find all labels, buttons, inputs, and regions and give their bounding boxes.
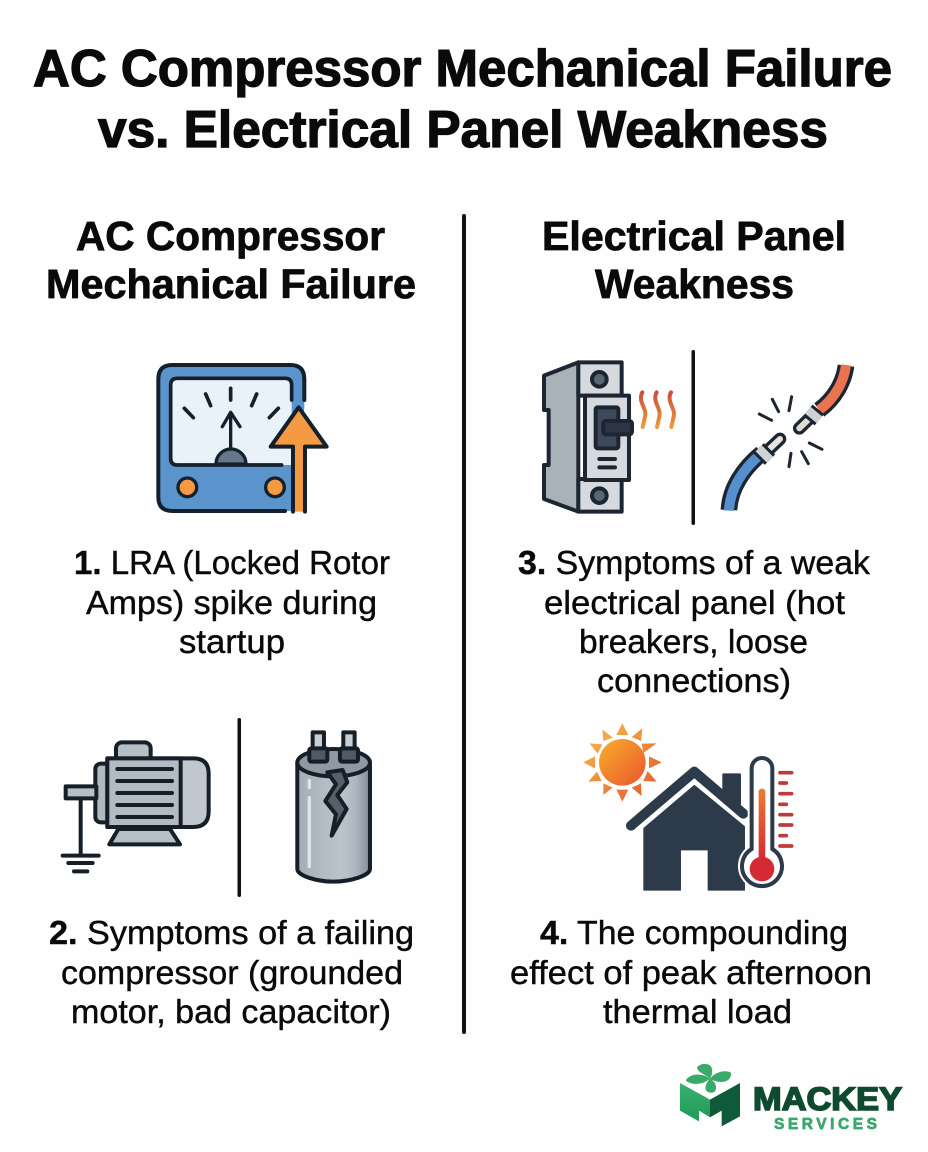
- icon: hot circuit breaker: [544, 362, 674, 512]
- icon: amp meter with rising arrow: [158, 365, 327, 512]
- icon: cracked capacitor: [297, 732, 370, 882]
- text: item 3: electrical panel (hot: [544, 584, 845, 621]
- text: item 4: [510, 914, 872, 1030]
- text: item 4: 4. The compounding: [540, 914, 848, 951]
- icon: loose wire connection: [729, 365, 846, 511]
- house: [631, 772, 744, 890]
- text: item 1: startup: [179, 623, 285, 660]
- logo mark: [680, 1064, 740, 1126]
- text: item 2: compressor (grounded: [61, 954, 403, 991]
- text: item 3: [518, 544, 871, 699]
- icon: sun, house and thermometer: [583, 723, 792, 890]
- thermometer: [742, 758, 792, 886]
- heading: AC compressor mechanical failure: [46, 213, 416, 307]
- title: [33, 40, 892, 159]
- heading: AC compressor mechanical failure: AC Compressor: [76, 213, 385, 259]
- logo: Mackey Services: SERVICES: [774, 1116, 877, 1133]
- heading: electrical panel weakness: Weakness: [595, 261, 794, 307]
- text: item 3: 3. Symptoms of a weak: [518, 544, 871, 581]
- text: item 1: [74, 544, 390, 660]
- text: item 1: Amps) spike during: [86, 584, 377, 621]
- icon: grounded motor: [63, 742, 209, 871]
- text: item 1: 1. LRA (Locked Rotor: [74, 544, 390, 581]
- text: item 3: connections): [597, 662, 791, 699]
- heading: electrical panel weakness: [542, 213, 846, 307]
- logo: Mackey Services: MACKEY: [753, 1081, 902, 1117]
- text: item 4: effect of peak afternoon: [510, 954, 872, 991]
- sun: [583, 723, 662, 802]
- heading: AC compressor mechanical failure: Mechanical Failure: [46, 261, 416, 307]
- divider: motor and capacitor: [238, 718, 241, 897]
- text: item 2: [49, 914, 414, 1030]
- text: item 3: breakers, loose: [579, 623, 808, 660]
- title: AC Compressor Mechanical Failure: [33, 40, 892, 98]
- logo: Mackey Services: [680, 1064, 902, 1133]
- title: vs. Electrical Panel Weakness: [98, 101, 828, 159]
- text: item 2: motor, bad capacitor): [71, 993, 391, 1030]
- divider: breaker and wires: [692, 350, 695, 525]
- heading: electrical panel weakness: Electrical Panel: [542, 213, 846, 259]
- center divider: [462, 214, 466, 1034]
- text: item 2: 2. Symptoms of a failing: [49, 914, 414, 951]
- text: item 4: thermal load: [603, 993, 792, 1030]
